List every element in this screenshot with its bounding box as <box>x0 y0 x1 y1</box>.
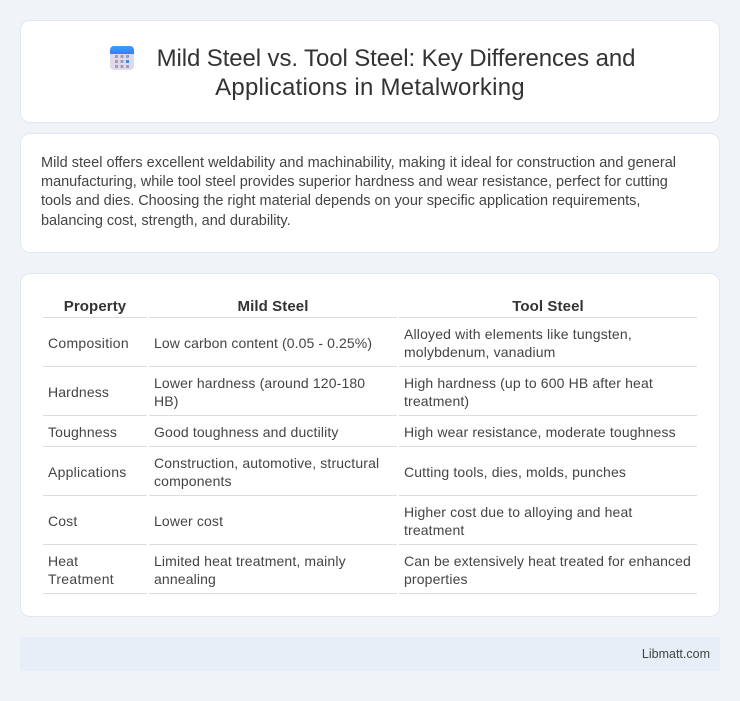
row: Composition: Alloyed with elements like tungsten, <box>404 326 632 342</box>
footer text: Libmatt.com <box>642 647 710 661</box>
intro panel <box>20 133 720 253</box>
row: Heat Treatment: annealing <box>154 571 216 587</box>
row: Hardness <box>48 375 653 409</box>
row: Cost <box>48 504 632 538</box>
title: Mild Steel vs. Tool Steel: Key Differences and <box>157 45 635 72</box>
header panel <box>20 20 720 123</box>
table panel <box>20 273 720 617</box>
row: Composition: Low carbon content (0.05 - 0.25%) <box>154 335 372 351</box>
intro text <box>41 155 676 229</box>
row: Heat Treatment <box>48 553 691 587</box>
row: Toughness: High wear resistance, moderate toughness <box>404 424 676 440</box>
row: Composition: molybdenum, vanadium <box>404 344 555 360</box>
row: Cost: Lower cost <box>154 513 223 529</box>
row: Hardness: Lower hardness (around 120-180 <box>154 375 365 391</box>
row: Composition <box>48 326 632 360</box>
icon: calendar <box>110 46 134 70</box>
row: Hardness: Hardness <box>48 384 109 400</box>
row: Toughness <box>48 424 676 440</box>
row: Heat Treatment: Can be extensively heat treated for enhanced <box>404 553 691 569</box>
intro text: tools and dies. Choosing the right material depends on your specific application requirements, <box>41 193 640 209</box>
footer bar <box>20 637 720 671</box>
intro text: manufacturing, while tool steel provides superior hardness and wear resistance, perfect for cutting <box>41 174 668 190</box>
row: Hardness: HB) <box>154 393 179 409</box>
row: Heat Treatment: Heat <box>48 553 78 569</box>
row: Hardness: High hardness (up to 600 HB after heat <box>404 375 653 391</box>
row: Heat Treatment: properties <box>404 571 468 587</box>
row: Cost: Higher cost due to alloying and heat <box>404 504 632 520</box>
row: Applications: Applications <box>48 464 126 480</box>
row: Applications: Cutting tools, dies, molds, punches <box>404 464 626 480</box>
table header: Property: Property <box>64 298 126 315</box>
table header: Mild Steel: Mild Steel <box>237 298 308 315</box>
row: Heat Treatment: Limited heat treatment, mainly <box>154 553 346 569</box>
row: Hardness: treatment) <box>404 393 469 409</box>
row: Applications <box>48 455 626 489</box>
title <box>157 45 635 101</box>
intro text: Mild steel offers excellent weldability and machinability, making it ideal for construction and general <box>41 155 676 171</box>
row: Composition: Composition <box>48 335 129 351</box>
row: Cost: Cost <box>48 513 77 529</box>
title: Applications in Metalworking <box>215 74 525 101</box>
table header: Tool Steel: Tool Steel <box>512 298 584 315</box>
row: Toughness: Good toughness and ductility <box>154 424 338 440</box>
row: Toughness: Toughness <box>48 424 117 440</box>
row: Heat Treatment: Treatment <box>48 571 114 587</box>
row: Applications: components <box>154 473 232 489</box>
row: Cost: treatment <box>404 522 464 538</box>
row: Applications: Construction, automotive, structural <box>154 455 379 471</box>
intro text: balancing cost, strength, and durability. <box>41 213 291 229</box>
